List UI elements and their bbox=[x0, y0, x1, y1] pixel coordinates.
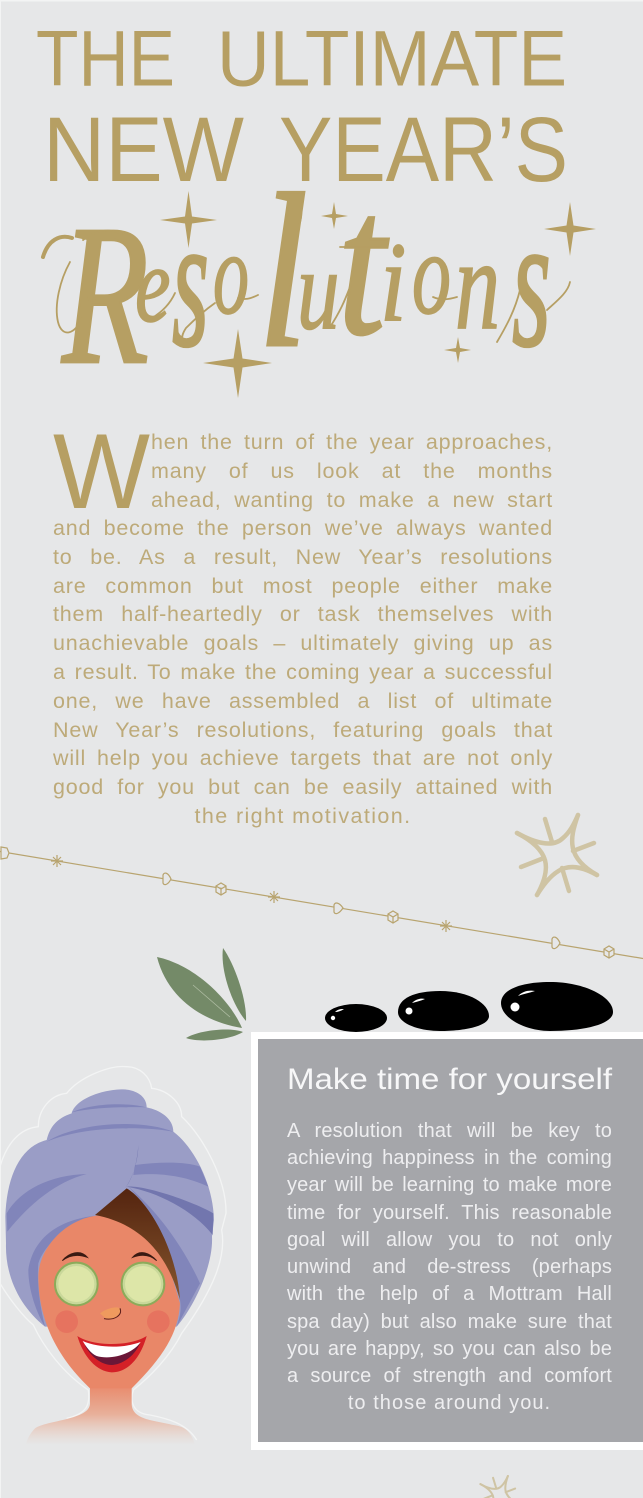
script word: Resolutions: e bbox=[135, 224, 171, 345]
title: THE bbox=[36, 14, 175, 102]
title: ULTIMATE bbox=[217, 14, 567, 102]
icon: black spa stones bbox=[325, 982, 613, 1032]
script word: Resolutions: o bbox=[412, 208, 451, 339]
text block: introduction bbox=[53, 430, 553, 828]
panel: make time for yourself background bbox=[251, 1032, 643, 1450]
text block: introduction: will help you achieve targets that are not only bbox=[53, 746, 553, 770]
text block: make time for yourself body: spa day) but also make sure that bbox=[287, 1311, 612, 1333]
script word: Resolutions: l bbox=[258, 150, 308, 393]
script word: Resolutions: R bbox=[61, 183, 149, 406]
text block: make time for yourself body: to those around you. bbox=[348, 1392, 551, 1414]
text block: introduction: to be. As a result, New Year’s resolutions bbox=[53, 545, 553, 569]
star: large sparkle cluster bbox=[160, 191, 596, 398]
illustration: woman with towel and cucumber eye mask bbox=[0, 1067, 226, 1445]
text block: introduction: unachievable goals – ultimately giving up as bbox=[53, 631, 553, 655]
title bbox=[36, 14, 568, 201]
text block: make time for yourself body: time for yourself. This reasonable bbox=[287, 1202, 612, 1224]
panel heading: Make time for yourself bbox=[287, 1063, 613, 1096]
icon: sun burst bbox=[517, 815, 597, 895]
text block: introduction: one, we have assembled a list of ultimate bbox=[53, 689, 553, 713]
script word: Resolutions: i bbox=[380, 219, 406, 345]
script word: Resolutions: o bbox=[213, 209, 249, 340]
script word: Resolutions bbox=[61, 150, 551, 406]
divider string with ornaments bbox=[0, 847, 643, 958]
text block: introduction: them half-heartedly or task themselves with bbox=[53, 602, 553, 626]
script flourishes bbox=[43, 204, 570, 344]
text block: introduction: a result. To make the coming year a successful bbox=[53, 660, 553, 684]
icon: green leaves bbox=[157, 948, 246, 1040]
text block: make time for yourself body bbox=[287, 1120, 612, 1414]
drop cap W: W bbox=[53, 411, 150, 531]
text block: make time for yourself body: achieving happiness in the coming bbox=[287, 1147, 612, 1169]
title: NEW bbox=[43, 99, 244, 201]
text block: make time for yourself body: A resolution that will be key to bbox=[287, 1120, 612, 1142]
text block: introduction: are common but most people either make bbox=[53, 574, 553, 598]
script word: Resolutions: u bbox=[297, 226, 340, 353]
title: YEAR’S bbox=[279, 99, 568, 201]
text block: introduction: hen the turn of the year approaches, bbox=[151, 430, 553, 454]
text block: make time for yourself body: goal will allow you to not only bbox=[287, 1229, 612, 1251]
text block: introduction: and become the person we’ve always wanted bbox=[53, 516, 553, 540]
text block: make time for yourself body: you are happy, so you can also be bbox=[287, 1338, 612, 1360]
script word: Resolutions: s bbox=[172, 177, 209, 387]
text block: introduction: many of us look at the months bbox=[151, 459, 553, 483]
text block: introduction: ahead, wanting to make a new start bbox=[151, 488, 553, 512]
text block: make time for yourself body: unwind and de-stress (perhaps bbox=[287, 1256, 612, 1278]
text block: introduction: the right motivation. bbox=[194, 804, 412, 828]
text block: make time for yourself body: a source of strength and comfort bbox=[287, 1365, 612, 1387]
text block: introduction: New Year’s resolutions, featuring goals that bbox=[53, 718, 553, 742]
script word: Resolutions: s bbox=[512, 176, 551, 386]
text block: make time for yourself body: with the help of a Mottram Hall bbox=[287, 1283, 612, 1305]
script word: Resolutions: t bbox=[338, 150, 389, 378]
script word: Resolutions: n bbox=[455, 213, 500, 357]
icon: small sun burst bbox=[480, 1476, 516, 1498]
text block: introduction: good for you but can be easily attained with bbox=[53, 775, 553, 799]
text block: make time for yourself body: year will be learning to make more bbox=[287, 1174, 612, 1196]
